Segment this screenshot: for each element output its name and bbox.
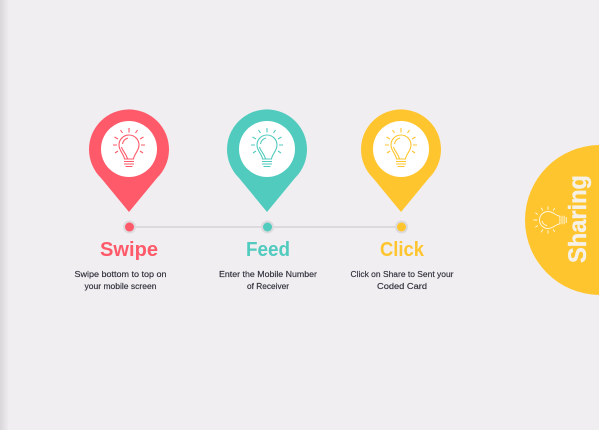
icon: light bulb (385, 128, 417, 166)
step: Swipe (74, 109, 169, 291)
timeline connector (129, 226, 402, 228)
timeline dot: Click (395, 220, 408, 234)
description: Feed (219, 270, 317, 291)
timeline dot: Feed (261, 220, 274, 234)
description: Swipe (74, 270, 166, 291)
description: Feed: Enter the Mobile Number (219, 270, 317, 279)
description: Swipe: your mobile screen (84, 282, 156, 291)
heading: Swipe: Swipe (100, 239, 158, 261)
description: Click: Click on Share to Sent your (350, 270, 454, 279)
icon: sideways light bulb (534, 206, 566, 234)
heading: Feed: Feed (246, 239, 290, 261)
heading: Click: Click (380, 239, 425, 261)
description: Swipe: Swipe bottom to top on (74, 270, 166, 279)
step: Feed (219, 109, 317, 291)
pin: Click (361, 109, 441, 212)
icon: light bulb (251, 128, 283, 166)
icon: light bulb (113, 128, 145, 166)
description: Click: Coded Card (377, 282, 427, 291)
pin: Swipe (89, 109, 169, 212)
timeline dot: Swipe (123, 220, 136, 234)
step: Click (350, 109, 454, 291)
pin: Feed (227, 109, 307, 212)
description: Click (350, 270, 454, 291)
vertical heading: Sharing: Sharing (564, 175, 592, 263)
section tab: Sharing (525, 145, 599, 295)
description: Feed: of Receiver (247, 282, 289, 291)
